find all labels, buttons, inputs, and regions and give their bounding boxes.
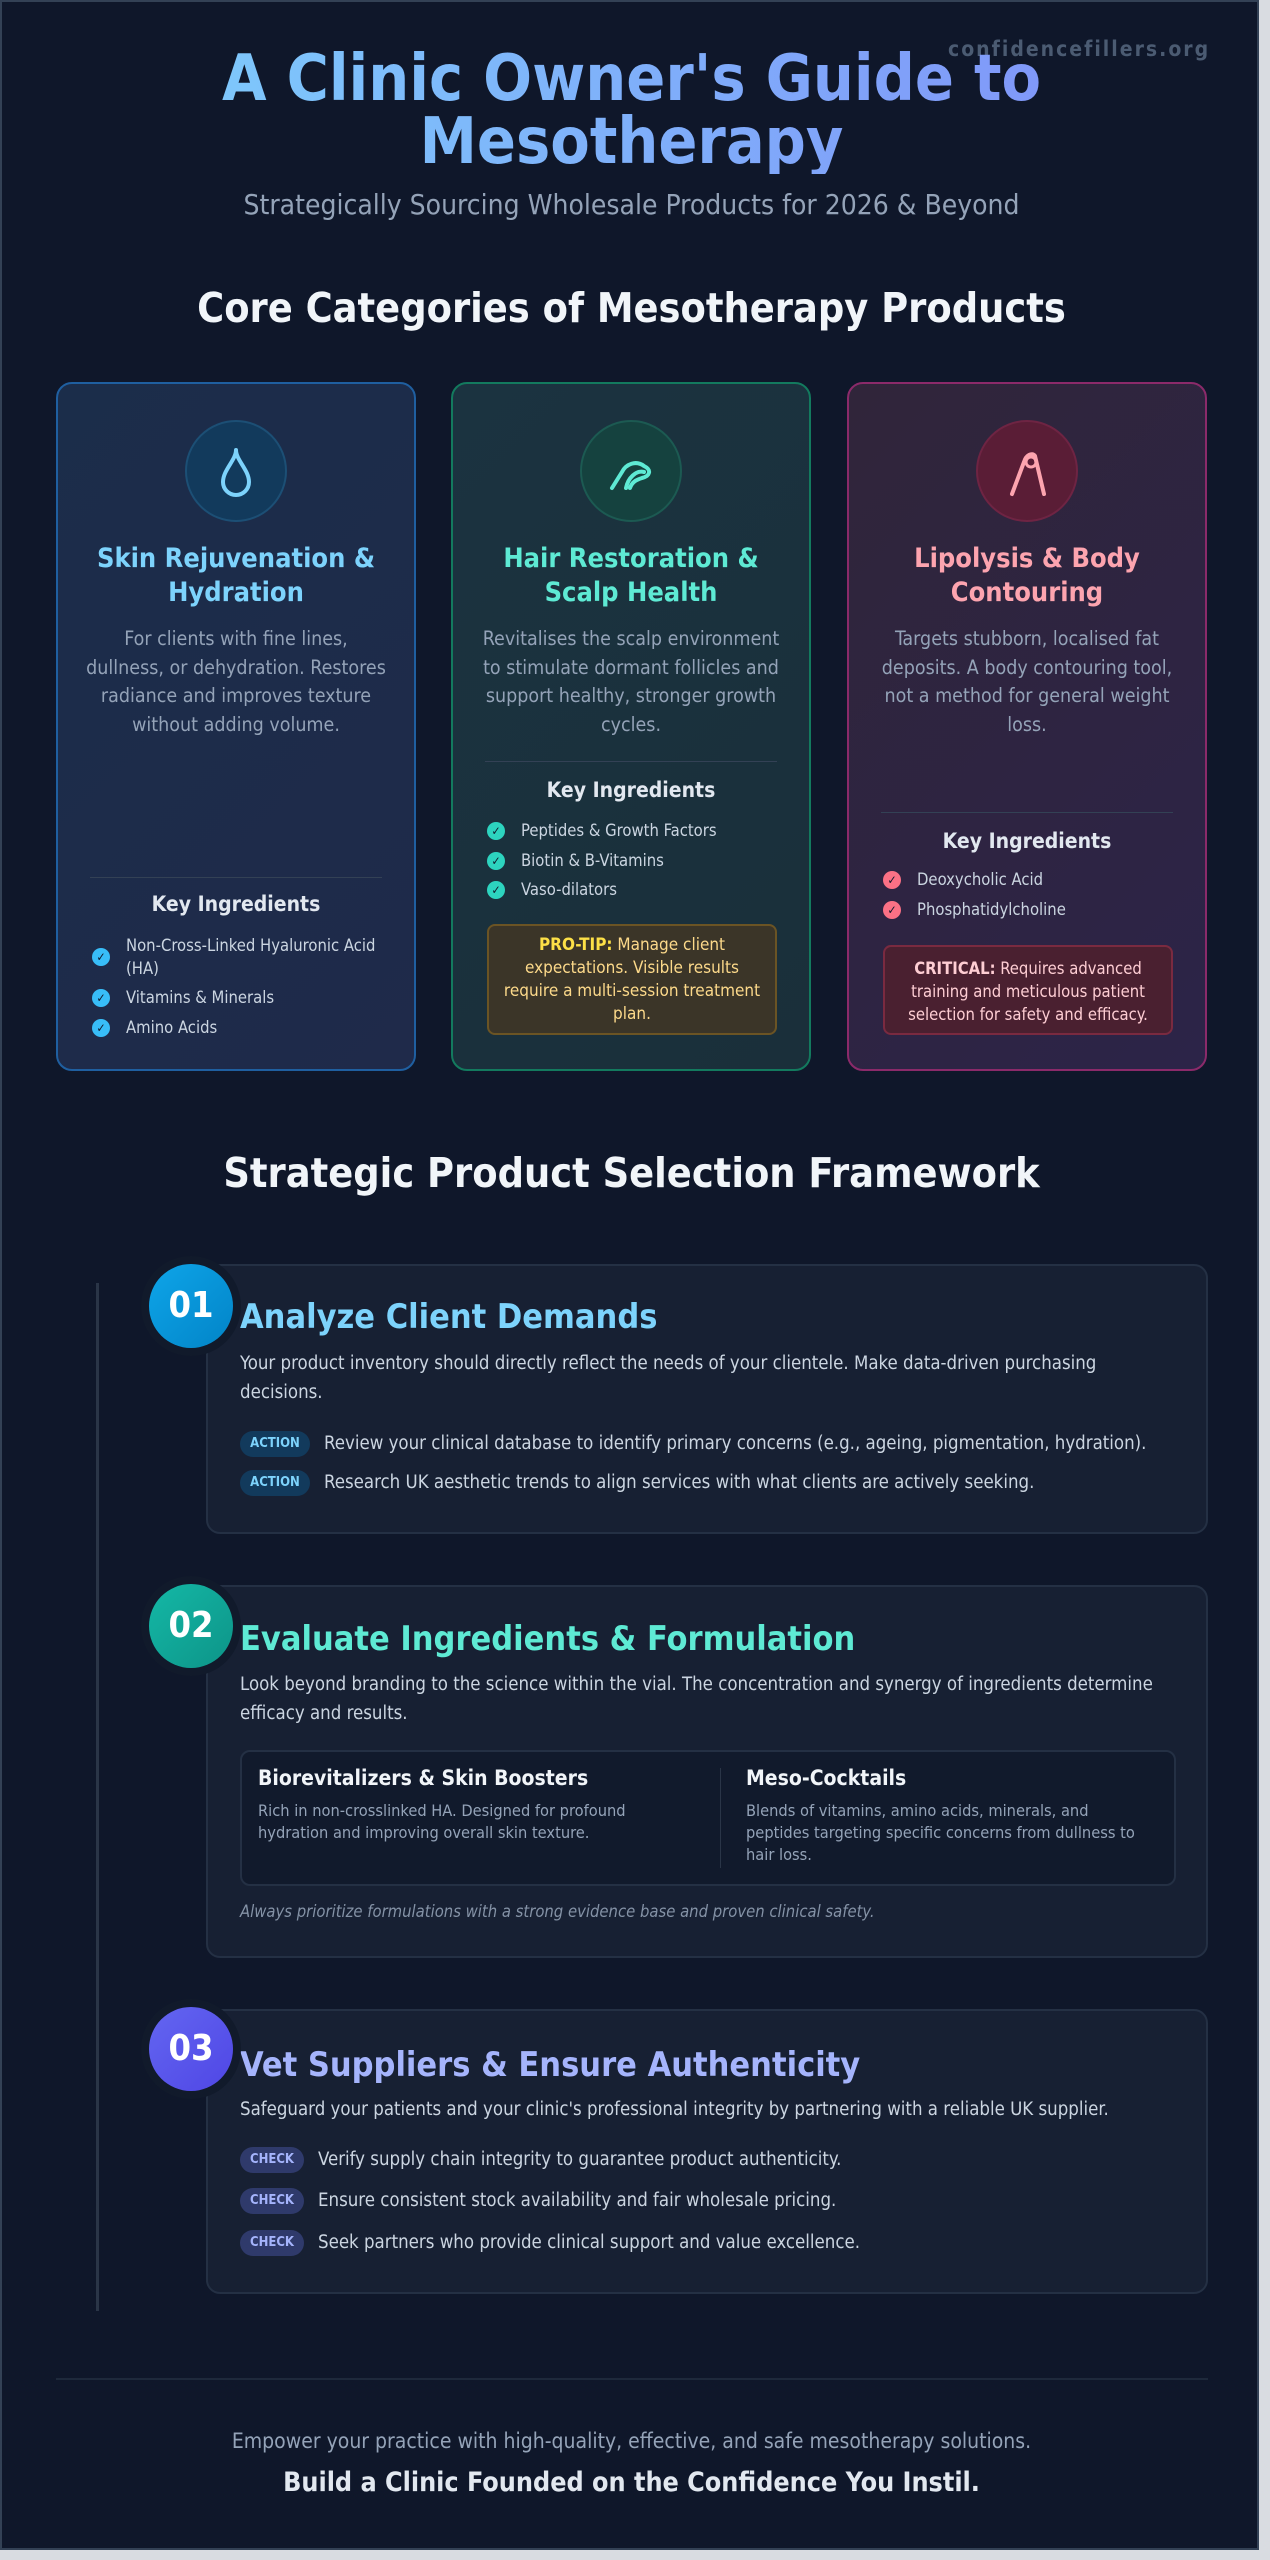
- step title: Analyze Client Demands: [240, 1297, 657, 1337]
- card title: [914, 543, 1140, 608]
- ingredient list: Deoxycholic Acid: [917, 870, 1043, 889]
- action item 1: Review your clinical database to identify primary concerns (e.g., ageing, pigmentation, hydration).: [324, 1433, 1146, 1454]
- column: biorevitalizers: [258, 1766, 626, 1842]
- footer tagline: Build a Clinic Founded on the Confidence You Instil.: [283, 2467, 980, 2498]
- step number 02: 02: [168, 1605, 214, 1646]
- check item 1: CHECK: [250, 2152, 294, 2167]
- panel: skin rejuvenation: [56, 382, 416, 1071]
- watermark: confidencefillers.org: [948, 37, 1210, 61]
- callout: pro-tip: PRO-TIP: Manage client expectations. Visible results require a multi-session treatment plan.: [504, 935, 760, 1024]
- ingredient list: ✓: [887, 903, 897, 917]
- title: [2, 48, 1261, 174]
- comparison box: [240, 1750, 1176, 1886]
- card title: Contouring: [951, 577, 1103, 608]
- column: meso-cocktails: Blends of vitamins, amino acids, minerals, and peptides targeting specific concerns from dullness to hair loss.: [746, 1801, 1135, 1864]
- ingredient list: ✓: [491, 854, 501, 868]
- step 2: [206, 1585, 1208, 1958]
- description: For clients with fine lines, dullness, or dehydration. Restores radiance and improves texture without adding volume.: [86, 627, 386, 736]
- card title: Skin Rejuvenation &: [97, 543, 375, 574]
- panel: lipolysis: [847, 382, 1207, 1071]
- description: Targets stubborn, localised fat deposits. A body contouring tool, not a method for general weight loss.: [882, 627, 1172, 736]
- action item 1: ACTION: [250, 1436, 300, 1451]
- card title: Scalp Health: [545, 577, 717, 608]
- column: meso-cocktails: [746, 1766, 1135, 1864]
- footer text: Empower your practice with high-quality, effective, and safe mesotherapy solutions.: [232, 2429, 1031, 2453]
- step title: Evaluate Ingredients & Formulation: [240, 1619, 855, 1659]
- step description: Safeguard your patients and your clinic's professional integrity by partnering with a reliable UK supplier.: [240, 2099, 1109, 2120]
- ingredient list: [487, 821, 717, 899]
- title: A Clinic Owner's Guide to: [222, 42, 1041, 116]
- step description: Look beyond branding to the science within the vial. The concentration and synergy of ingredients determine efficacy and results.: [240, 1674, 1153, 1724]
- action item 2: Research UK aesthetic trends to align services with what clients are actively seeking.: [324, 1472, 1034, 1493]
- check item 2: CHECK: [250, 2193, 294, 2208]
- action item 2: ACTION: [250, 1475, 300, 1490]
- ingredient list: Vitamins & Minerals: [126, 988, 274, 1007]
- heading: core categories: Core Categories of Mesotherapy Products: [197, 284, 1066, 332]
- ingredient list: ✓: [96, 1021, 106, 1035]
- step 1: [206, 1264, 1208, 1534]
- card title: [503, 543, 759, 608]
- step number 03: 03: [168, 2028, 214, 2069]
- description: Revitalises the scalp environment to stimulate dormant follicles and support healthy, stronger growth cycles.: [483, 627, 779, 736]
- callout: critical: CRITICAL: Requires advanced training and meticulous patient selection for safety and efficacy.: [908, 959, 1148, 1024]
- step number 02: [149, 1584, 233, 1668]
- subtitle: Strategically Sourcing Wholesale Products for 2026 & Beyond: [243, 188, 1020, 221]
- ingredient list: ✓: [491, 824, 501, 838]
- timeline line: [96, 1283, 99, 2311]
- callout: critical: [883, 945, 1173, 1035]
- icon: water drop: [185, 420, 287, 522]
- step number 03: [149, 2007, 233, 2091]
- card title: Hydration: [168, 577, 304, 608]
- step 3: [206, 2009, 1208, 2294]
- card title: Hair Restoration &: [503, 543, 759, 574]
- check item 3: CHECK: [250, 2235, 294, 2250]
- ingredient list: ✓: [96, 950, 106, 964]
- panel: hair restoration: [451, 382, 811, 1071]
- heading: framework: Strategic Product Selection Framework: [223, 1149, 1040, 1197]
- ingredient list: Biotin & B-Vitamins: [521, 851, 664, 870]
- ingredient list: Amino Acids: [126, 1018, 217, 1037]
- ingredient list: ✓: [491, 883, 501, 897]
- column: meso-cocktails: Meso-Cocktails: [746, 1766, 906, 1790]
- step number 01: 01: [168, 1285, 214, 1326]
- icon: hair: [580, 420, 682, 522]
- title: Mesotherapy: [420, 105, 843, 179]
- column: biorevitalizers: Rich in non-crosslinked HA. Designed for profound hydration and improving overall skin texture.: [258, 1801, 626, 1842]
- ingredient list: Vaso-dilators: [521, 880, 617, 899]
- ingredient list: ✓: [96, 991, 106, 1005]
- column: biorevitalizers: Biorevitalizers & Skin Boosters: [258, 1766, 588, 1790]
- ingredient list: Phosphatidylcholine: [917, 900, 1066, 919]
- check item 1: Verify supply chain integrity to guarantee product authenticity.: [318, 2149, 841, 2170]
- ingredient list: [883, 870, 1066, 919]
- note: Always prioritize formulations with a strong evidence base and proven clinical safety.: [240, 1902, 875, 1921]
- check item 2: Ensure consistent stock availability and fair wholesale pricing.: [318, 2190, 836, 2211]
- ingredient list: Non-Cross-Linked Hyaluronic Acid (HA): [126, 936, 375, 978]
- check item 3: Seek partners who provide clinical support and value excellence.: [318, 2232, 860, 2253]
- icon: body contour: [976, 420, 1078, 522]
- key ingredients heading: Key Ingredients: [547, 778, 715, 802]
- key ingredients heading: Key Ingredients: [152, 892, 320, 916]
- step title: Vet Suppliers & Ensure Authenticity: [240, 2045, 860, 2085]
- ingredient list: ✓: [887, 873, 897, 887]
- ingredient list: Peptides & Growth Factors: [521, 821, 717, 840]
- ingredient list: [92, 936, 375, 1037]
- step description: Your product inventory should directly reflect the needs of your clientele. Make data-driven purchasing decisions.: [240, 1353, 1096, 1403]
- card title: Lipolysis & Body: [914, 543, 1140, 574]
- card title: [97, 543, 375, 608]
- key ingredients heading: Key Ingredients: [943, 829, 1111, 853]
- step number 01: [149, 1264, 233, 1348]
